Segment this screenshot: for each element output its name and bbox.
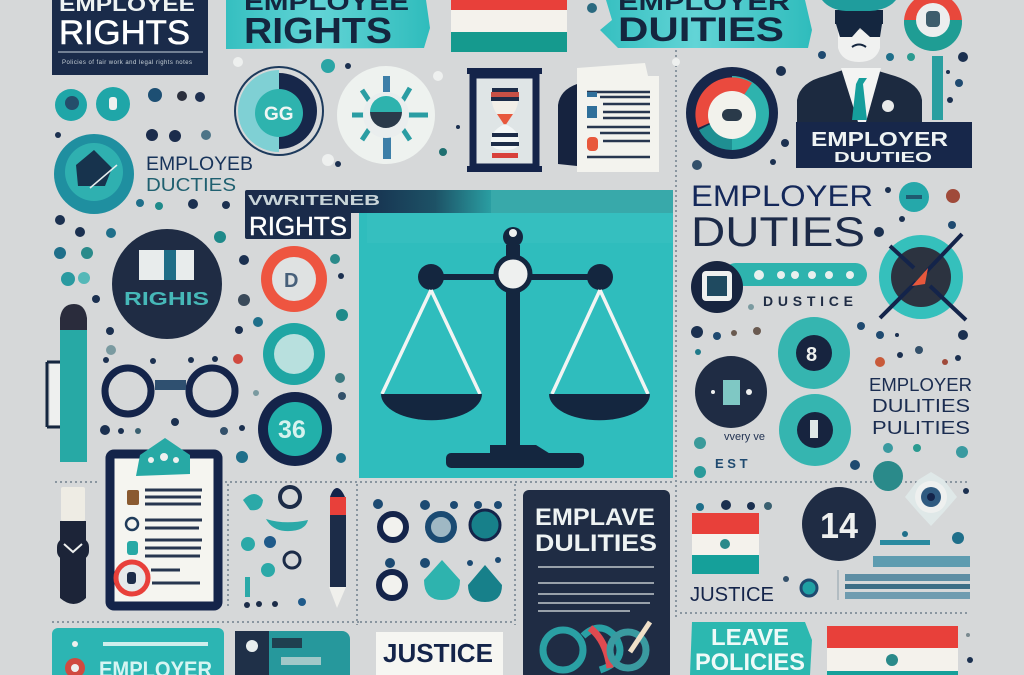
text: employer duties pulities: DULITIES (872, 396, 970, 416)
icon: hourglass frame (467, 68, 542, 172)
heading: employee rights banner: RIGHTS (244, 10, 392, 51)
panel: central scales of justice (359, 190, 673, 478)
icon: officer figure (797, 0, 922, 122)
heading: written rights: VWRITENEB (248, 192, 380, 209)
label: justice (376, 632, 503, 675)
heading: employer duties: DUTIES (691, 208, 865, 255)
heading: justice subtitle: DUSTICE (763, 293, 853, 309)
panel: employee duties dark (523, 490, 670, 675)
heading: written rights (245, 190, 491, 241)
icon: flag lower right (692, 513, 759, 574)
icon: dark rights circle (112, 229, 222, 339)
panel: employee duties dark: DULITIES (535, 530, 657, 557)
icon: red ring (261, 246, 327, 312)
icon: half ring dial: GG (264, 104, 294, 125)
heading: employee rights banner (226, 0, 430, 51)
icon: pen vertical (47, 304, 87, 462)
panel: employee rights top left (52, 0, 208, 75)
heading: employer duties: EMPLOYER (691, 180, 873, 213)
panel: employee rights top left: Policies of fair work and legal rights notes (62, 60, 192, 66)
text: E S T (715, 456, 748, 471)
panel: small teal card (235, 631, 350, 675)
icon: target top right (904, 0, 962, 120)
icon: gear (905, 472, 957, 526)
heading: justice subtitle (691, 261, 867, 313)
icon: dark square circle (695, 356, 767, 428)
icon: infinity loops (543, 622, 650, 670)
panel: employee duties dark: EMPLAVE (535, 504, 655, 531)
icon: dark circle 8 (778, 317, 850, 389)
text: employer duties pulities (869, 375, 972, 438)
icon: pencil (329, 488, 346, 608)
icon: employee duties circle (54, 134, 134, 214)
icon: flag top (451, 0, 567, 52)
icons: ring cluster (373, 499, 502, 602)
icon: half ring dial (235, 67, 323, 155)
icons: small circles row (55, 87, 211, 142)
text: employer duties pulities: PULITIES (872, 418, 970, 438)
icon: teal ring (263, 323, 325, 385)
text: justice lower right: JUSTICE (690, 584, 774, 606)
icon: number badge (258, 392, 332, 466)
icon: dark rights circle: RIGHIS (124, 289, 209, 309)
icon: glasses (105, 368, 235, 414)
icon: watch (57, 487, 89, 604)
icon: number 14 (802, 487, 876, 561)
icon: number badge: 36 (278, 416, 306, 444)
heading: employer duties banner: DUITIES (618, 11, 784, 49)
block: table bars (801, 540, 970, 600)
label: justice: JUSTICE (383, 638, 493, 668)
text: employer duties pulities: EMPLOYER (869, 375, 972, 395)
icon: compass (879, 234, 966, 320)
text: vvery ve (724, 431, 765, 443)
icon: document (558, 63, 659, 172)
panel: leave policies (690, 622, 812, 675)
text: employee duties: DUCTIES (146, 175, 236, 195)
heading: employer duties (691, 180, 873, 255)
icon: flag bottom right (827, 626, 958, 675)
icon: clipboard checklist (110, 438, 218, 606)
icon: scales (381, 227, 650, 468)
text: employee duties: EMPLOYEB (146, 154, 253, 175)
icons: teal cluster (241, 487, 308, 608)
heading: employer duties banner (600, 0, 812, 49)
heading: written rights: RIGHTS (249, 211, 347, 241)
text: employee duties (146, 154, 253, 195)
label: employer duties dark: EMPLOYER (811, 129, 949, 151)
panel: employee rights top left: RIGHTS (59, 14, 190, 52)
panel: leave policies: LEAVE (711, 624, 789, 650)
icon: red ring: D (284, 270, 298, 292)
icon: gear circle (337, 66, 435, 164)
icon: dark circle 8: 8 (806, 344, 817, 366)
icon: teal circle lower (779, 394, 851, 466)
label: employer duties dark: DUUTIEO (834, 149, 932, 166)
icon: teal small circle (899, 182, 929, 212)
panel: employer bottom left (52, 628, 224, 675)
icon: ring chart right (686, 67, 778, 159)
label: employer duties dark (796, 122, 972, 168)
icon: number 14: 14 (820, 505, 858, 546)
